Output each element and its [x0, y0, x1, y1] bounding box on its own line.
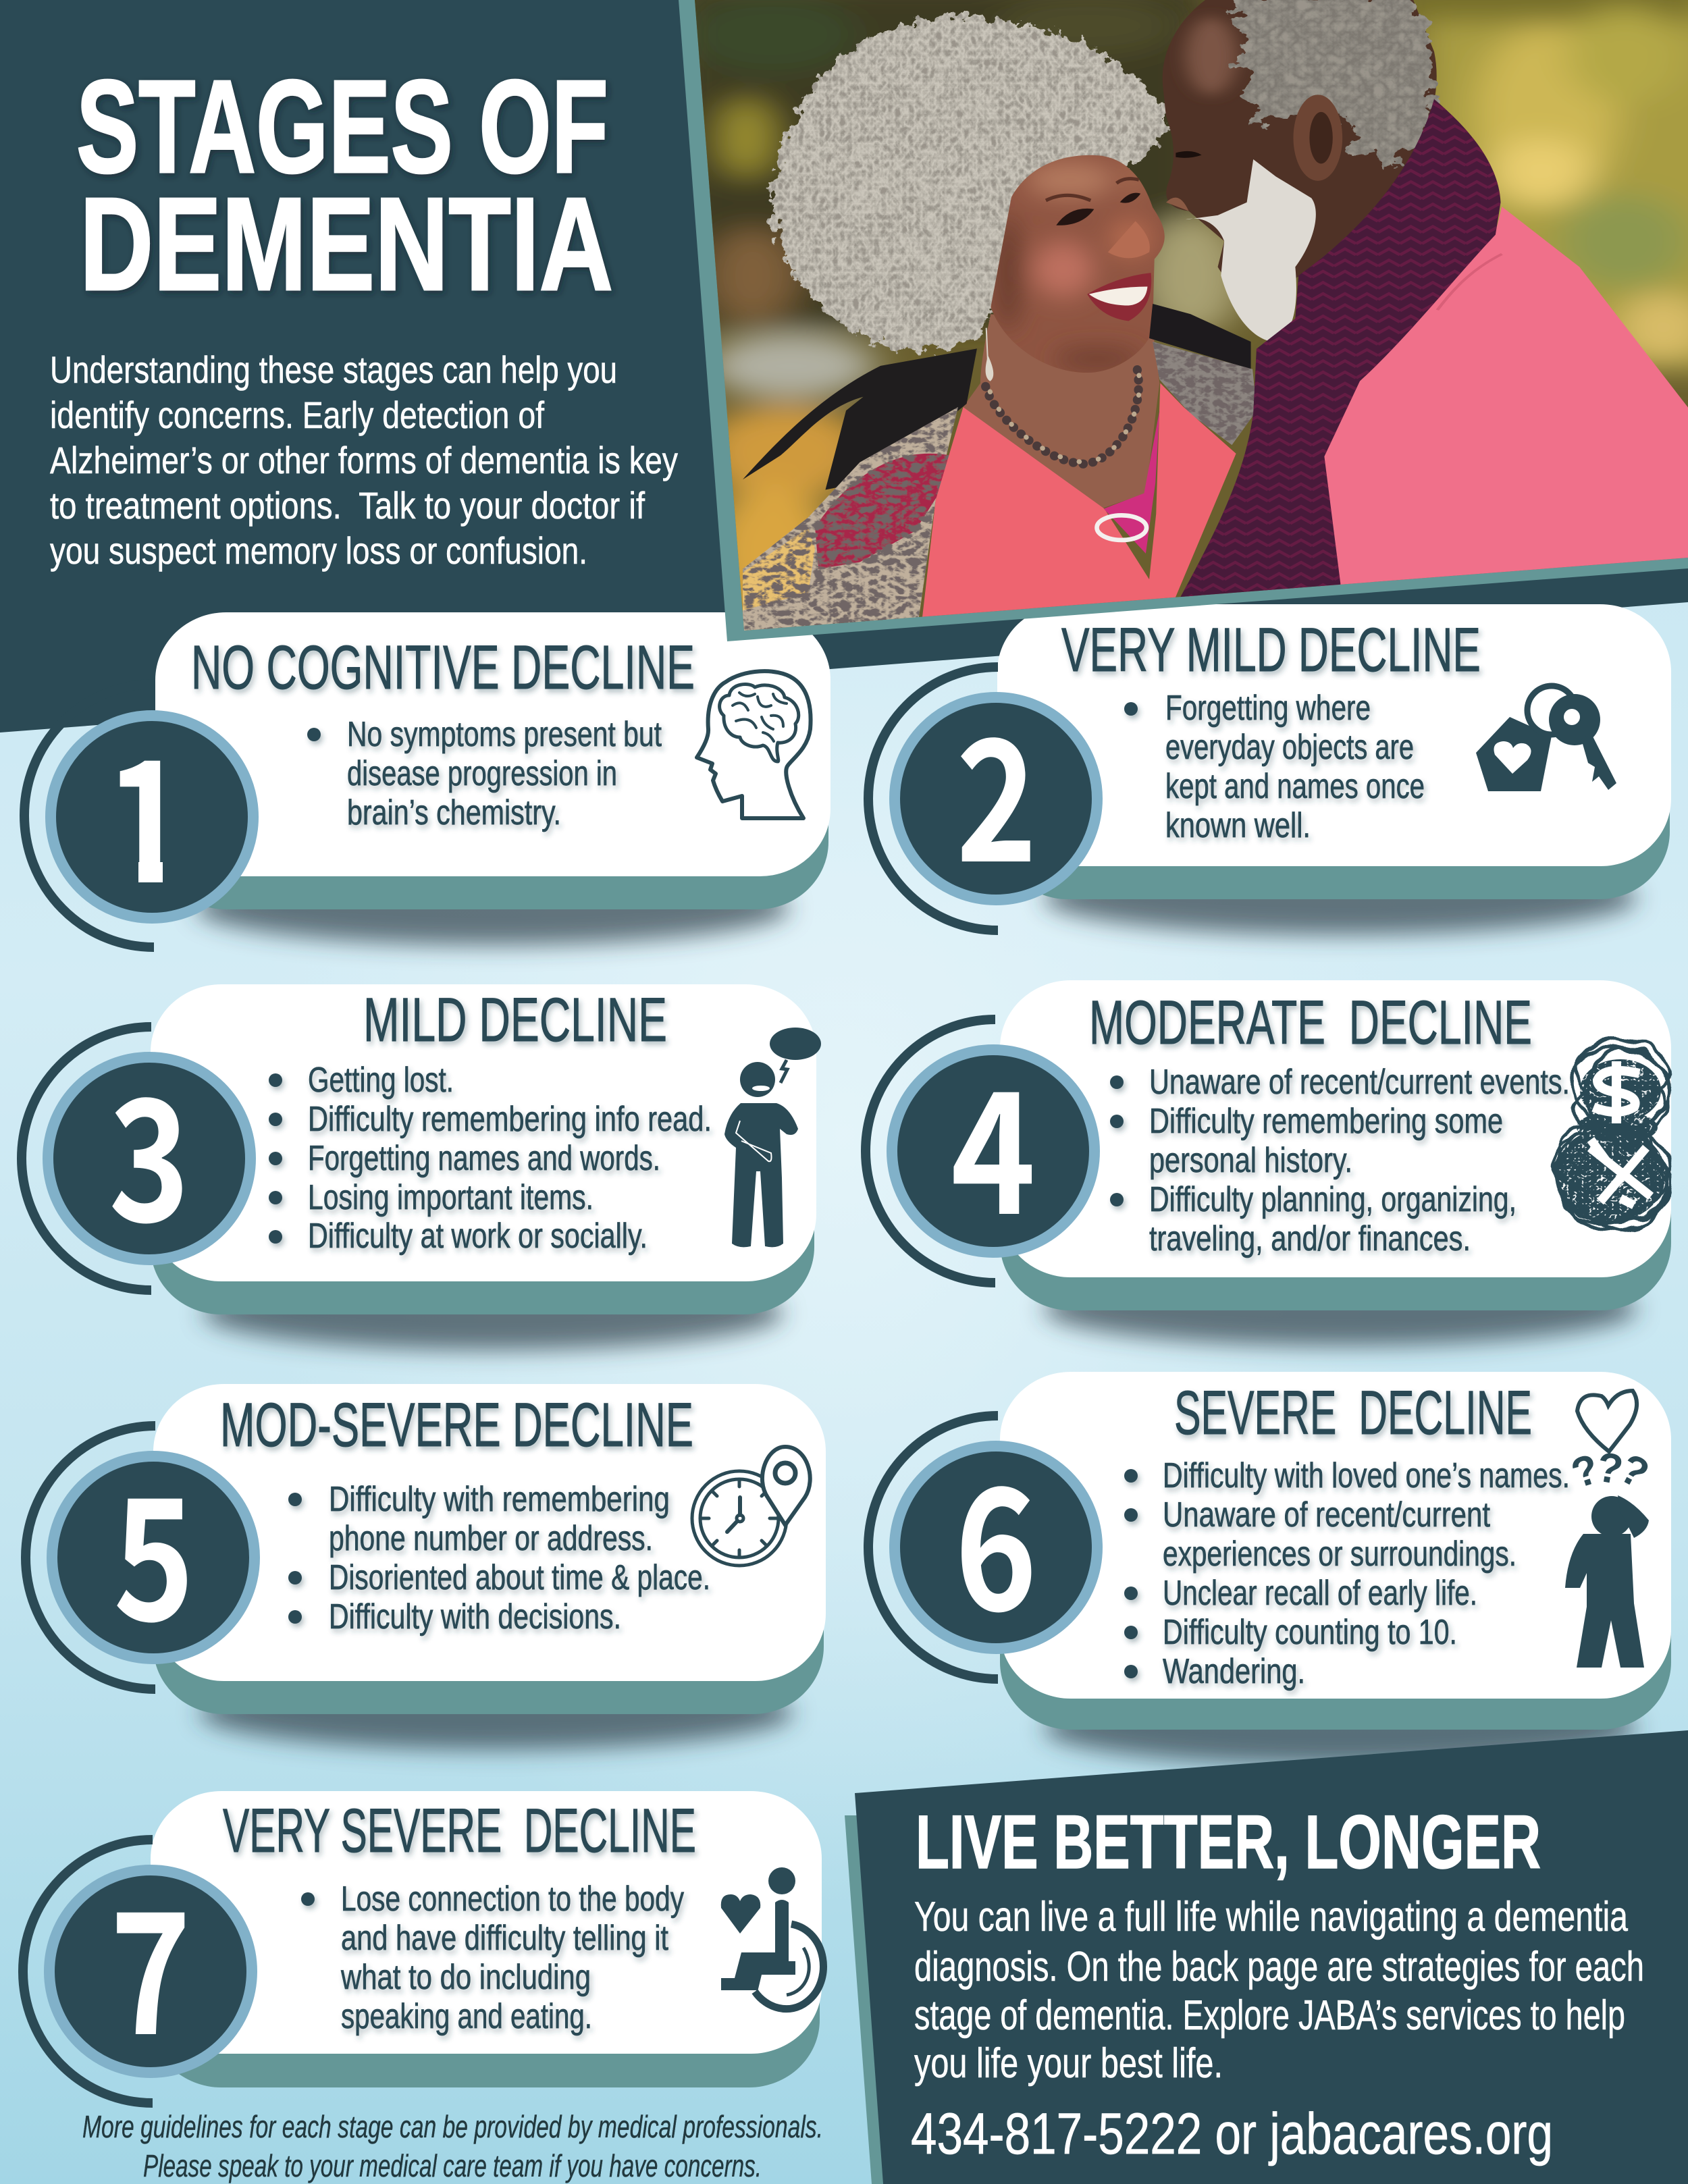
- bullet list: what to do including: [340, 1958, 591, 1997]
- icon: confused person with heart: ?: [1593, 1443, 1627, 1494]
- bullet list: speaking and eating.: [341, 1997, 592, 2036]
- bullet list: Difficulty at work or socially.: [308, 1217, 648, 1256]
- number badge 7: [23, 1838, 252, 2103]
- footnote: [82, 2109, 823, 2183]
- bullet list: Difficulty remembering some: [1149, 1102, 1503, 1141]
- footnote: Please speak to your medical care team if you have concerns.: [143, 2148, 762, 2183]
- bottom panel: live better, longer: [845, 1730, 1688, 2184]
- woman hair: [772, 17, 1167, 351]
- heading: VERY SEVERE DECLINE: [223, 1796, 696, 1865]
- bullet list: Losing important items.: [308, 1178, 594, 1217]
- intro text: [50, 348, 678, 572]
- icon: wheelchair with heart: [721, 1867, 823, 2009]
- card 5: mod-severe decline: [153, 1384, 826, 1714]
- black shawl: [743, 348, 977, 490]
- intro text: identify concerns. Early detection of: [50, 394, 544, 436]
- icon: confused person with heart: ?: [1566, 1445, 1605, 1497]
- photo: smiling older couple: [695, 0, 1688, 631]
- man scarf: [1153, 99, 1501, 646]
- bullet list: Difficulty with decisions.: [329, 1597, 621, 1636]
- heading: MOD-SEVERE DECLINE: [220, 1391, 693, 1460]
- bullet list: personal history.: [1149, 1141, 1352, 1180]
- card 6: severe decline: [1000, 1372, 1671, 1730]
- bullet list: Difficulty remembering info read.: [308, 1100, 712, 1139]
- woman neck and chest: [964, 314, 1159, 509]
- icon: confused person with heart: ?: [1612, 1445, 1656, 1498]
- number badge 1: 1: [105, 687, 189, 931]
- number badge 7: 7: [110, 1838, 191, 2083]
- woman face: [991, 155, 1165, 373]
- bullet list: Unclear recall of early life.: [1163, 1574, 1477, 1613]
- bullet list: [1124, 689, 1425, 845]
- bullet list: [301, 1880, 684, 2036]
- bullet list: Difficulty counting to 10.: [1163, 1613, 1457, 1652]
- text block: live better description: you life your best life.: [914, 2040, 1223, 2087]
- number badge 3: 3: [109, 1026, 190, 1270]
- card 4: moderate decline: [1000, 980, 1674, 1310]
- number badge 2: 2: [956, 666, 1037, 910]
- bullet list: everyday objects are: [1165, 728, 1414, 767]
- bullet list: kept and names once: [1165, 767, 1425, 806]
- man: [1153, 0, 1688, 646]
- bullet list: experiences or surroundings.: [1163, 1535, 1516, 1574]
- contact line: 434-817-5222 or jabacares.org: [911, 2102, 1553, 2166]
- title: DEMENTIA: [80, 170, 613, 318]
- patterned scarf right: [1149, 304, 1257, 445]
- bullet list: [307, 715, 662, 832]
- intro text: you suspect memory loss or confusion.: [50, 529, 587, 572]
- bullet list: Difficulty with remembering: [329, 1480, 670, 1519]
- bullet list: Difficulty with loved one’s names.: [1163, 1456, 1570, 1495]
- number badge 5: [26, 1424, 255, 1689]
- bullet list: [269, 1061, 712, 1256]
- intro text: Understanding these stages can help you: [50, 348, 617, 391]
- text block: live better description: [914, 1894, 1644, 2087]
- bullet list: Unaware of recent/current events.: [1149, 1063, 1570, 1102]
- number badge 4: 4: [951, 1018, 1036, 1262]
- dark header panel: [0, 0, 1688, 733]
- bullet list: [1124, 1456, 1570, 1691]
- necklace, earring and brooch: [986, 328, 1146, 540]
- heading: MILD DECLINE: [363, 986, 667, 1055]
- intro text: to treatment options. Talk to your doctor if: [50, 484, 645, 527]
- number badge 6: [868, 1414, 1097, 1679]
- number badge 2: [868, 666, 1097, 930]
- man shirt: [1321, 207, 1688, 646]
- card 3: mild decline: [151, 984, 821, 1314]
- title: [76, 53, 613, 318]
- number badge 6: 6: [955, 1414, 1037, 1659]
- intro text: Alzheimer’s or other forms of dementia is key: [50, 439, 678, 481]
- woman: [743, 17, 1257, 651]
- number badge 4: [866, 1018, 1094, 1283]
- card 7: very severe decline: [151, 1791, 823, 2087]
- icon: confused person with heart: [1565, 1391, 1656, 1668]
- heading: VERY MILD DECLINE: [1061, 616, 1481, 685]
- icon: thinking person: [724, 1028, 821, 1247]
- bullet list: phone number or address.: [329, 1519, 653, 1558]
- photo frame: [679, 0, 1688, 641]
- icon: head with brain: [697, 671, 811, 818]
- card shadows: [196, 861, 1637, 1765]
- number badge 3: [22, 1026, 250, 1290]
- number badge 5: 5: [113, 1424, 194, 1669]
- photo background bokeh: [695, 0, 1688, 631]
- patterned scarf left: [743, 407, 958, 635]
- bullet list: and have difficulty telling it: [341, 1919, 668, 1958]
- icon: scribbled dollar sign and airplane: [1552, 1040, 1674, 1237]
- bullet list: [288, 1480, 710, 1636]
- bullet list: [1110, 1063, 1570, 1258]
- number badge 1: [24, 684, 253, 947]
- card 1: no cognitive decline: [155, 612, 830, 909]
- bullet list: traveling, and/or finances.: [1149, 1219, 1471, 1258]
- bullet list: Getting lost.: [308, 1061, 454, 1100]
- bullet list: disease progression in: [347, 754, 617, 793]
- bullet list: Unaware of recent/current: [1163, 1495, 1490, 1535]
- bullet list: Forgetting where: [1165, 689, 1371, 728]
- bullet list: brain’s chemistry.: [347, 793, 561, 832]
- bullet list: Difficulty planning, organizing,: [1149, 1180, 1516, 1219]
- bullet list: No symptoms present but: [347, 715, 662, 754]
- bullet list: known well.: [1165, 806, 1311, 845]
- title: STAGES OF: [76, 53, 608, 201]
- woman sweater: [922, 383, 1236, 617]
- footnote: More guidelines for each stage can be provided by medical professionals.: [82, 2109, 823, 2144]
- icon: house keys: [1476, 686, 1616, 791]
- bullet list: Lose connection to the body: [341, 1880, 684, 1919]
- bullet list: Wandering.: [1163, 1652, 1305, 1691]
- card 2: very mild decline: [997, 604, 1671, 899]
- heading: NO COGNITIVE DECLINE: [191, 633, 695, 702]
- bullet list: Disoriented about time & place.: [329, 1558, 710, 1597]
- bullet list: Forgetting names and words.: [308, 1139, 660, 1178]
- man beard: [1186, 159, 1316, 342]
- icon: clock and location pin: [692, 1447, 810, 1566]
- man head: [1163, 0, 1437, 289]
